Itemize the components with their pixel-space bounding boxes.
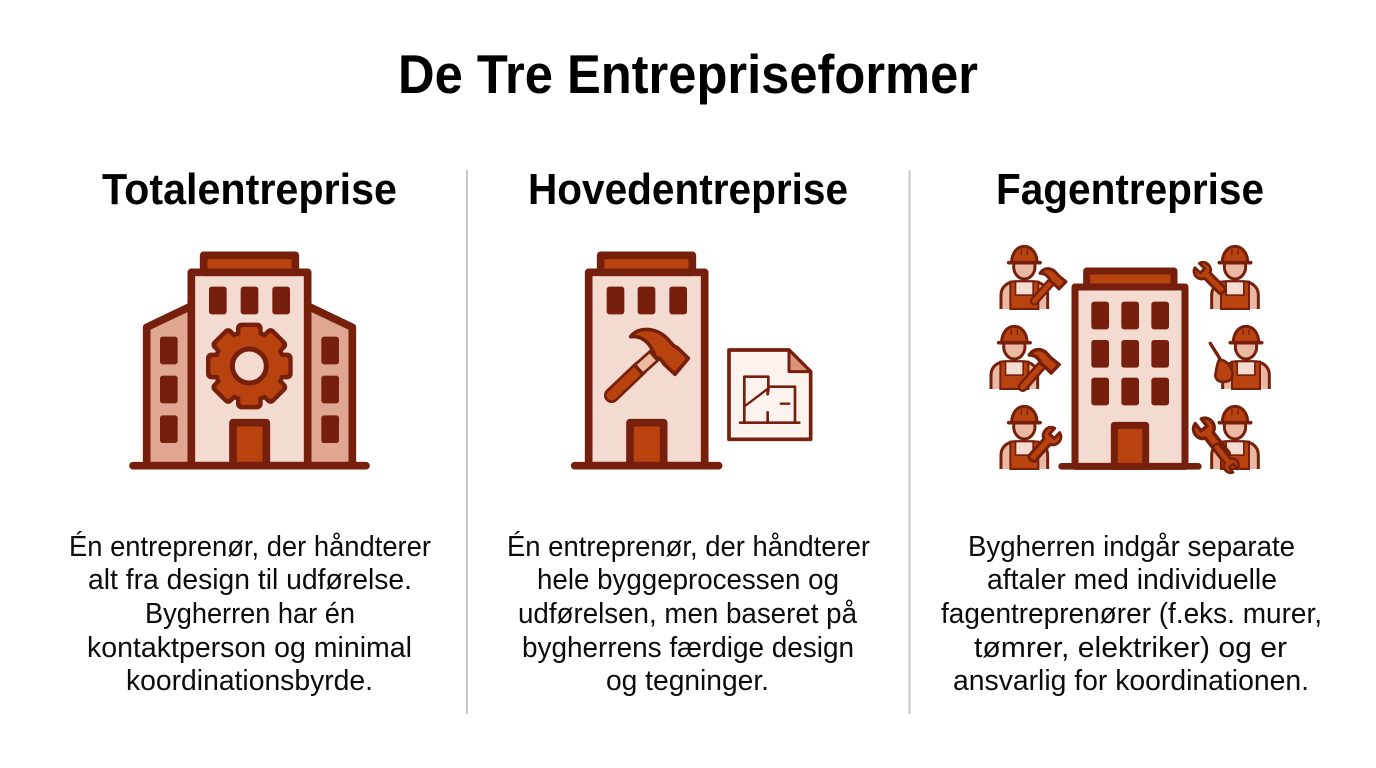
worker with wrench, top right	[1191, 246, 1258, 309]
text block: Hovedentreprise description: hele byggeprocessen og	[537, 564, 839, 596]
text block: Hovedentreprise description: bygherrens færdige design	[522, 632, 854, 664]
divider right	[908, 170, 910, 714]
heading: Fagentreprise: Fagentreprise	[996, 165, 1264, 214]
worker with wrench, bottom left	[1001, 406, 1064, 469]
worker with wrench, bottom right	[1190, 406, 1258, 475]
text block: Hovedentreprise description	[507, 530, 870, 697]
divider left	[466, 170, 468, 714]
panel: Totalentreprise	[69, 165, 431, 697]
icon: building surrounded by workers	[991, 246, 1269, 475]
text block: Fagentreprise description: Bygherren indgår separate	[968, 531, 1295, 563]
text block: Totalentreprise description: alt fra design til udførelse.	[88, 564, 412, 596]
heading: Hovedentreprise: Hovedentreprise	[528, 165, 848, 214]
text block: Totalentreprise description	[69, 530, 431, 697]
text block: Totalentreprise description: Bygherren har én	[145, 598, 355, 630]
worker with screwdriver, middle right	[1210, 326, 1269, 389]
text block: Totalentreprise description: koordinationsbyrde.	[126, 665, 373, 697]
text block: Hovedentreprise description: og tegninger.	[606, 665, 769, 697]
text block: Fagentreprise description: tømrer, elektriker) og er	[974, 632, 1287, 664]
icon: floor plan document	[729, 350, 811, 439]
text block: Totalentreprise description: kontaktperson og minimal	[87, 632, 412, 664]
text block: Hovedentreprise description: udførelsen, men baseret på	[518, 598, 858, 630]
title: De Tre Entrepriseformer	[398, 43, 978, 105]
worker with hammer, middle left	[991, 326, 1059, 389]
icon: building with hammer and floor plan	[575, 255, 811, 466]
text block: Fagentreprise description: ansvarlig for koordinationen.	[953, 665, 1309, 697]
text block: Fagentreprise description	[941, 531, 1322, 697]
text block: Fagentreprise description: aftaler med individuelle	[987, 564, 1277, 596]
panel: Fagentreprise	[941, 165, 1322, 697]
worker with hammer, top left	[1001, 246, 1066, 309]
icon: office building with gear	[133, 255, 366, 466]
heading: Totalentreprise: Totalentreprise	[102, 165, 397, 214]
panel: Hovedentreprise	[507, 165, 870, 697]
text block: Hovedentreprise description: Én entreprenør, der håndterer	[507, 530, 870, 563]
text block: Totalentreprise description: Én entreprenør, der håndterer	[69, 530, 431, 563]
text block: Fagentreprise description: fagentreprenører (f.eks. murer,	[941, 598, 1322, 630]
